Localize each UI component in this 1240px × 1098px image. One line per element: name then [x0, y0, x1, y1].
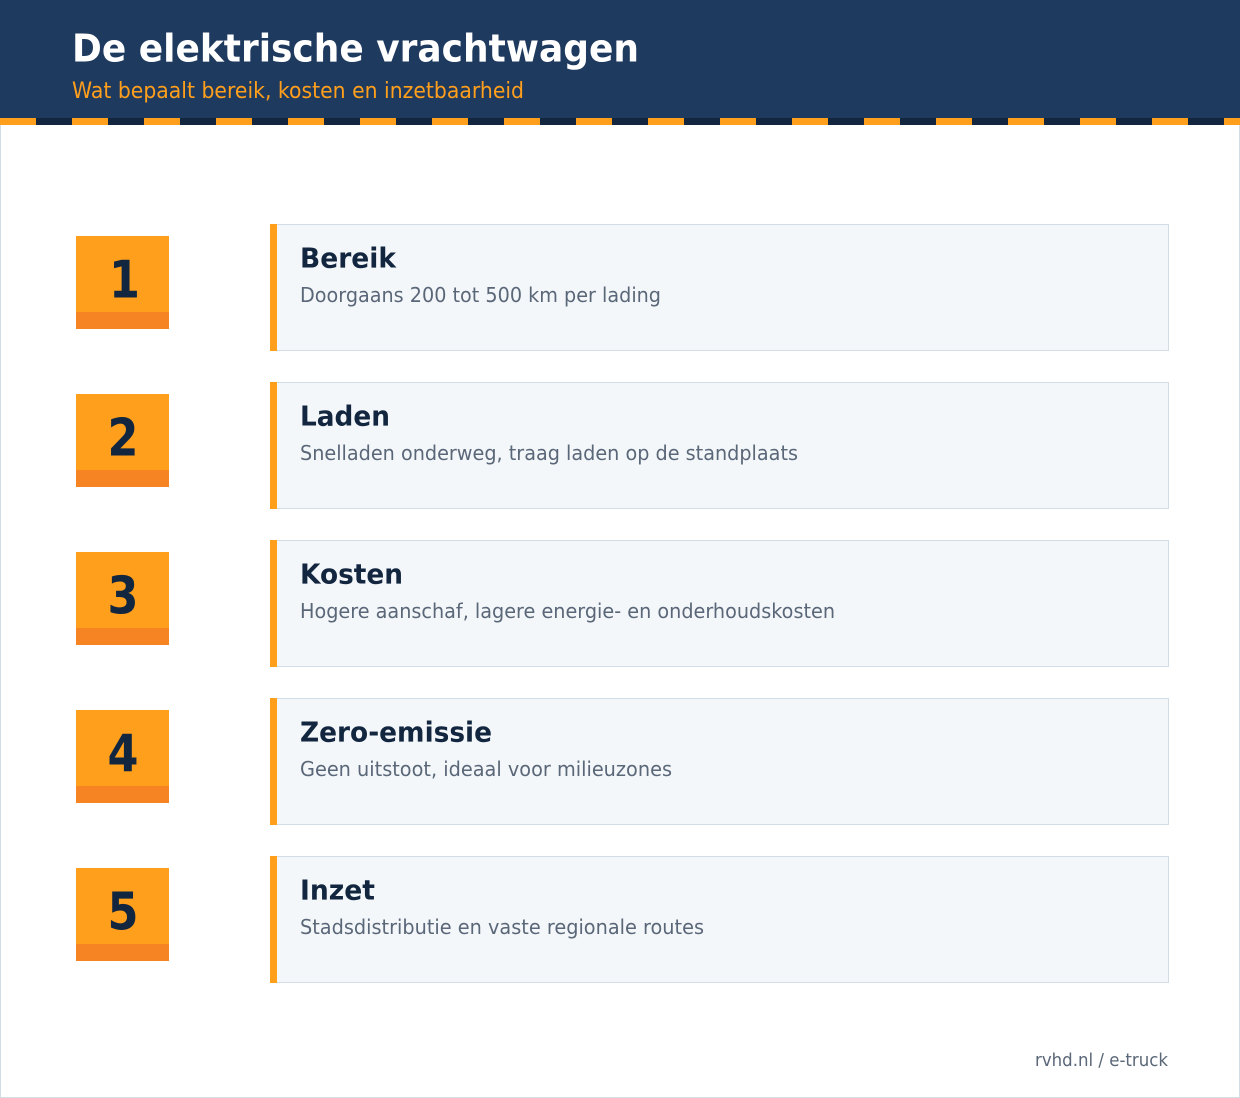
card: Bereik: Bereik [300, 242, 397, 274]
title: De elektrische vrachtwagen [72, 26, 639, 70]
step 5 [76, 856, 1168, 983]
number badge 3 [76, 552, 169, 645]
card: Zero-emissie: Zero-emissie [300, 716, 492, 748]
card: Kosten: Kosten [300, 558, 403, 590]
card: Bereik: Doorgaans 200 tot 500 km per lading [300, 283, 661, 307]
step 1 [76, 224, 1168, 351]
card: Zero-emissie [270, 698, 1168, 825]
footer credit: rvhd.nl / e-truck [1035, 1050, 1169, 1071]
card: Laden [270, 382, 1168, 509]
step 3 [76, 540, 1168, 667]
card: Bereik [270, 224, 1168, 351]
step 2 [76, 382, 1168, 509]
card: Zero-emissie: Geen uitstoot, ideaal voor milieuzones [300, 757, 672, 781]
number badge 1: 1 [109, 250, 140, 310]
subtitle: Wat bepaalt bereik, kosten en inzetbaarheid [72, 79, 524, 104]
card: Kosten [270, 540, 1168, 667]
number badge 2 [76, 394, 169, 487]
card: Inzet [270, 856, 1168, 983]
card: Laden: Laden [300, 400, 390, 432]
number badge 5: 5 [108, 882, 138, 942]
card: Kosten: Hogere aanschaf, lagere energie- en onderhoudskosten [300, 599, 835, 623]
number badge 4: 4 [108, 724, 138, 784]
card: Inzet: Stadsdistributie en vaste regionale routes [300, 915, 704, 939]
hazard stripe [0, 118, 1240, 125]
card: Inzet: Inzet [300, 874, 375, 906]
number badge 5 [76, 868, 169, 961]
step 4 [76, 698, 1168, 825]
number badge 3: 3 [108, 566, 138, 626]
card: Laden: Snelladen onderweg, traag laden op de standplaats [300, 441, 798, 465]
number badge 4 [76, 710, 169, 803]
number badge 2: 2 [108, 408, 138, 468]
number badge 1 [76, 236, 169, 329]
header banner [0, 0, 1240, 118]
